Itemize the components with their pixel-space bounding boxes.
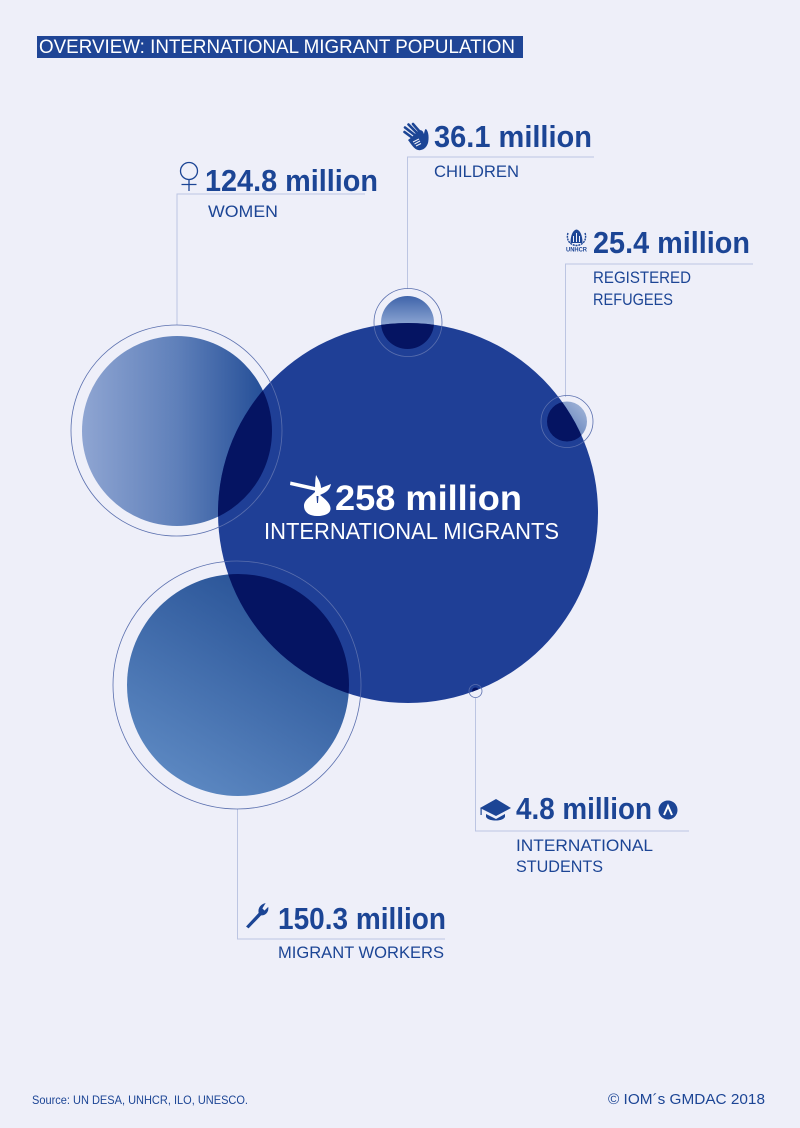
- circle: registered refugees: [547, 402, 587, 442]
- label: INTERNATIONAL MIGRANTS: [264, 518, 559, 544]
- rings: [71, 288, 593, 809]
- leader lines: [177, 157, 753, 939]
- label: STUDENTS: [516, 857, 603, 876]
- credit: © IOM´s GMDAC 2018: [608, 1091, 765, 1108]
- callout: children: [404, 119, 592, 181]
- circle: migrant workers: [127, 574, 349, 796]
- number: 25.4 million: [593, 225, 750, 260]
- label: INTERNATIONAL: [516, 836, 653, 855]
- icon: UNESCO badge: [658, 800, 678, 820]
- icon: UNHCR emblem: [566, 230, 587, 254]
- label: [516, 836, 653, 876]
- icon: hands: [404, 124, 429, 150]
- icon: bundle on stick: [290, 475, 331, 516]
- number: 258 million: [335, 479, 522, 518]
- callout: registered refugees: [566, 225, 750, 309]
- label: CHILDREN: [434, 162, 519, 181]
- callout: migrant workers: [246, 901, 446, 962]
- label: [593, 268, 691, 309]
- circle: international migrants: [218, 323, 598, 703]
- circle: women: [82, 336, 272, 526]
- label: REGISTERED: [593, 268, 691, 287]
- number: 36.1 million: [434, 119, 592, 154]
- icon: UNHCR emblem: UNHCR: [566, 246, 587, 254]
- label: MIGRANT WORKERS: [278, 943, 444, 962]
- callout: women: [180, 162, 378, 221]
- source note: Source: UN DESA, UNHCR, ILO, UNESCO.: [32, 1093, 248, 1107]
- title: OVERVIEW: INTERNATIONAL MIGRANT POPULATION: [39, 37, 515, 58]
- centre label: 258 million international migrants: [264, 475, 559, 544]
- callout: international students: [480, 791, 678, 876]
- icon: graduation cap: [480, 799, 511, 820]
- number: 150.3 million: [278, 901, 446, 936]
- overlaps with main circle: [218, 323, 582, 694]
- icon: female symbol: [180, 162, 198, 191]
- number: 4.8 million: [516, 791, 652, 826]
- circle: children: [381, 296, 434, 349]
- icon: wrench: [246, 904, 268, 928]
- label: WOMEN: [208, 202, 278, 221]
- number: 124.8 million: [205, 163, 378, 198]
- label: REFUGEES: [593, 290, 673, 309]
